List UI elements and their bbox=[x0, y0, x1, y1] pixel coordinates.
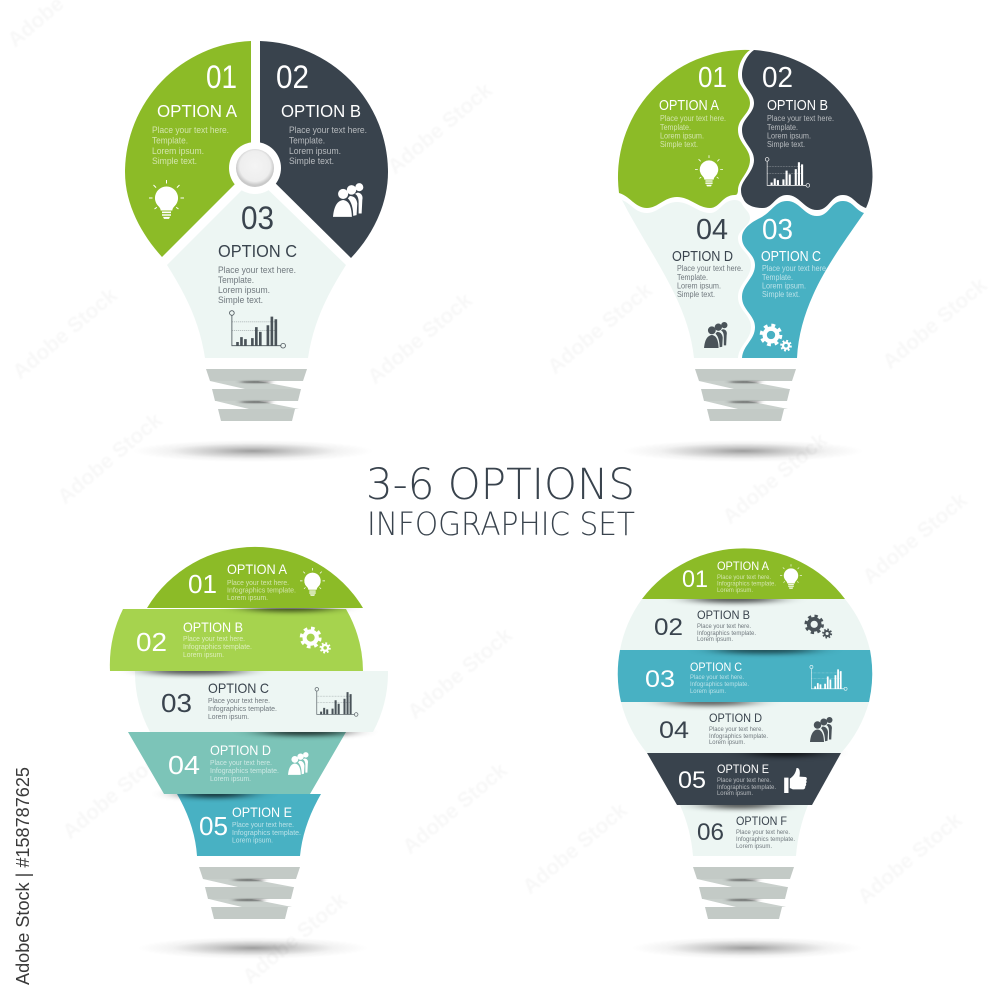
segment 06 option F bbox=[680, 805, 808, 856]
segment 03 option C: Simple text. bbox=[762, 290, 800, 299]
segment 05 option E: Lorem ipsum. bbox=[232, 838, 273, 844]
segment 03 option C: 03 bbox=[762, 214, 793, 246]
segment 02 option B bbox=[741, 50, 873, 210]
segment 05 option E: OPTION E bbox=[717, 762, 769, 776]
panel: bulb with 5 options bbox=[110, 547, 388, 959]
segment 03 option C: Lorem ipsum. bbox=[762, 282, 806, 290]
watermark: Adobe Stock pattern: Adobe Stock bbox=[58, 744, 172, 844]
segment 03 option C: Simple text. bbox=[218, 295, 263, 305]
segment 04 option D: Infographics template. bbox=[709, 733, 768, 740]
side credit: Adobe Stock id: Adobe Stock | #158787625 bbox=[13, 767, 33, 985]
segment 03 option C: 03 bbox=[241, 200, 274, 236]
watermark: Adobe Stock pattern: Adobe Stock bbox=[853, 809, 967, 909]
segment 05 option E bbox=[647, 753, 841, 809]
segment 03 option C: Lorem ipsum. bbox=[218, 285, 270, 295]
segment 01 option A: Place your text here. bbox=[227, 580, 289, 587]
segment 04 option D: 04 bbox=[659, 717, 689, 744]
panel: bulb with 3 options bbox=[125, 41, 388, 462]
lamp base bbox=[695, 369, 796, 421]
segment 05 option E: Infographics template. bbox=[232, 830, 301, 837]
segment 02 option B: 02 bbox=[136, 627, 167, 657]
segment 01 option A bbox=[618, 50, 750, 208]
segment 03 option C: OPTION C bbox=[690, 660, 742, 674]
watermark: Adobe Stock pattern: Adobe Stock bbox=[403, 624, 517, 724]
segment 01 option A: Lorem ipsum. bbox=[227, 595, 268, 602]
segment 06 option F: Place your text here. bbox=[736, 829, 790, 836]
segment 01 option A: Place your text here. bbox=[660, 114, 726, 123]
watermark: Adobe Stock pattern: Adobe Stock bbox=[858, 489, 972, 589]
segment 02 option B: Lorem ipsum. bbox=[183, 652, 224, 659]
segment 02 option B: Infographics template. bbox=[183, 644, 252, 651]
segment 01 option A: Template. bbox=[660, 123, 691, 132]
segment 03 option C: Lorem ipsum. bbox=[208, 714, 249, 721]
segment 04 option D: Lorem ipsum. bbox=[210, 776, 251, 783]
segment 04 option D: Place your text here. bbox=[210, 760, 272, 767]
segment 05 option E: Place your text here. bbox=[232, 822, 294, 829]
segment 03 option C: Place your text here. bbox=[690, 674, 744, 681]
watermark: Adobe Stock pattern: Adobe Stock bbox=[878, 274, 992, 374]
segment 04 option D bbox=[622, 200, 751, 358]
segment 04 option D: Infographics template. bbox=[210, 768, 279, 775]
segment 01 option A bbox=[642, 548, 845, 603]
title: 3-6 OPTIONS bbox=[366, 460, 635, 510]
segment 03 option C: OPTION C bbox=[218, 241, 297, 261]
bulb shadow bbox=[623, 440, 863, 462]
segment 01 option A: OPTION A bbox=[227, 561, 288, 577]
segment 01 option A: OPTION A bbox=[659, 98, 719, 114]
segment 02 option B: Place your text here. bbox=[697, 623, 751, 630]
segment 02 option B: OPTION B bbox=[697, 608, 750, 622]
segment 05 option E: Place your text here. bbox=[717, 777, 771, 784]
segment 04 option D: Simple text. bbox=[677, 290, 715, 299]
segment 01 option A: Infographics template. bbox=[227, 588, 296, 594]
segment 04 option D: OPTION D bbox=[709, 711, 762, 725]
segment 03 option C: Infographics template. bbox=[690, 681, 749, 688]
segment 02 option B: Lorem ipsum. bbox=[697, 636, 733, 643]
segment 02 option B: OPTION B bbox=[281, 101, 361, 121]
segment 01 option A: 01 bbox=[206, 59, 237, 95]
segment 06 option F: Infographics template. bbox=[736, 836, 795, 843]
segment 03 option C bbox=[135, 671, 388, 736]
segment 03 option C bbox=[167, 177, 346, 358]
segment 01 option A: 01 bbox=[698, 62, 727, 94]
watermark: Adobe Stock pattern: Adobe Stock bbox=[363, 289, 477, 389]
segment 04 option D: Lorem ipsum. bbox=[709, 739, 745, 746]
segment 03 option C: OPTION C bbox=[208, 680, 269, 696]
segment 04 option D: OPTION D bbox=[672, 249, 733, 265]
segment 01 option A: 01 bbox=[188, 569, 217, 599]
segment 04 option D: Place your text here. bbox=[709, 726, 763, 733]
watermark: Adobe Stock pattern: Adobe Stock bbox=[8, 284, 122, 384]
segment 02 option B: Infographics template. bbox=[697, 630, 756, 637]
watermark: Adobe Stock pattern: Adobe Stock bbox=[383, 79, 497, 179]
segment 03 option C: Infographics template. bbox=[208, 706, 277, 713]
panel: bulb with 6 options bbox=[618, 548, 872, 959]
segment 02 option B: 02 bbox=[276, 59, 309, 95]
segment 03 option C bbox=[618, 650, 872, 706]
segment 01 option A: OPTION A bbox=[157, 101, 237, 121]
segment 02 option B: Place your text here. bbox=[767, 114, 834, 123]
bulb shadow bbox=[133, 440, 373, 462]
segment 05 option E: 05 bbox=[678, 767, 706, 794]
segment 05 option E: 05 bbox=[199, 811, 228, 841]
segment 05 option E: Infographics template. bbox=[717, 784, 776, 791]
segment 03 option C: Place your text here. bbox=[208, 698, 270, 705]
title bbox=[366, 460, 635, 543]
bulb shadow bbox=[632, 937, 862, 959]
segment 01 option A: Lorem ipsum. bbox=[660, 132, 704, 140]
segment 02 option B: Template. bbox=[767, 123, 798, 132]
watermark: Adobe Stock pattern: Adobe Stock bbox=[543, 279, 657, 379]
segment 03 option C bbox=[742, 201, 864, 358]
segment 02 option B: Lorem ipsum. bbox=[767, 132, 811, 140]
segment 03 option C: Lorem ipsum. bbox=[690, 688, 726, 695]
segment 01 option A bbox=[125, 41, 251, 257]
segment 04 option D: Lorem ipsum. bbox=[677, 282, 721, 290]
segment 05 option E: OPTION E bbox=[232, 804, 292, 820]
segment 05 option E: Lorem ipsum. bbox=[717, 790, 753, 797]
segment 01 option A: OPTION A bbox=[717, 559, 769, 573]
segment 01 option A: Lorem ipsum. bbox=[717, 587, 753, 594]
segment 01 option A: Template. bbox=[152, 136, 188, 146]
segment 02 option B: Lorem ipsum. bbox=[289, 146, 341, 156]
watermark: Adobe Stock pattern: Adobe Stock bbox=[238, 889, 352, 989]
segment 03 option C: 03 bbox=[645, 666, 675, 693]
segment 01 option A: Simple text. bbox=[152, 156, 197, 166]
segment 01 option A: Place your text here. bbox=[152, 125, 229, 135]
segment 02 option B: Simple text. bbox=[289, 156, 334, 166]
segment 02 option B: Place your text here. bbox=[183, 636, 245, 643]
segment 01 option A: Infographics template. bbox=[717, 580, 776, 588]
segment 03 option C: Place your text here. bbox=[218, 265, 296, 275]
watermark: Adobe Stock pattern: Adobe Stock bbox=[718, 429, 832, 529]
segment 02 option B: 02 bbox=[762, 62, 793, 94]
segment 03 option C: 03 bbox=[161, 688, 192, 718]
segment 06 option F: 06 bbox=[697, 819, 724, 846]
segment 02 option B: 02 bbox=[654, 614, 683, 641]
segment 03 option C: Place your text here. bbox=[762, 264, 828, 273]
segment 02 option B: Simple text. bbox=[767, 140, 805, 149]
watermark: Adobe Stock pattern: Adobe Stock bbox=[398, 759, 512, 859]
segment 02 option B: Place your text here. bbox=[289, 125, 367, 135]
segment 04 option D: Template. bbox=[677, 273, 708, 282]
segment 04 option D: OPTION D bbox=[210, 742, 271, 758]
segment 04 option D: 04 bbox=[168, 750, 200, 780]
segment 06 option F: OPTION F bbox=[736, 814, 787, 828]
segment 01 option A bbox=[147, 547, 363, 612]
segment 03 option C: Template. bbox=[762, 273, 793, 282]
lamp base bbox=[199, 867, 300, 919]
segment 02 option B bbox=[260, 41, 388, 258]
segment 04 option D: Place your text here. bbox=[677, 264, 743, 273]
segment 02 option B: OPTION B bbox=[767, 98, 828, 114]
title: INFOGRAPHIC SET bbox=[367, 505, 635, 543]
watermark: Adobe Stock pattern: Adobe Stock bbox=[518, 799, 632, 899]
segment 06 option F: Lorem ipsum. bbox=[736, 843, 772, 850]
lamp base bbox=[693, 867, 794, 919]
segment 04 option D bbox=[621, 702, 869, 757]
segment 01 option A: Place your text here. bbox=[717, 574, 771, 581]
panel: bulb with 4 options bbox=[618, 50, 873, 462]
bulb shadow bbox=[138, 937, 368, 959]
segment 04 option D: 04 bbox=[696, 214, 728, 246]
segment 02 option B: OPTION B bbox=[183, 619, 243, 635]
watermark: Adobe Stock pattern: Adobe Stock bbox=[53, 409, 167, 509]
segment 03 option C: Template. bbox=[218, 275, 254, 285]
center disc bbox=[229, 142, 281, 194]
segment 05 option E bbox=[177, 794, 321, 856]
segment 03 option C: OPTION C bbox=[761, 249, 821, 265]
lamp base bbox=[206, 369, 307, 421]
segment 04 option D bbox=[128, 732, 346, 798]
segment 01 option A: Simple text. bbox=[660, 140, 698, 149]
segment 01 option A: Lorem ipsum. bbox=[152, 146, 204, 156]
segment 02 option B: Template. bbox=[289, 136, 325, 146]
segment 01 option A: 01 bbox=[682, 566, 708, 593]
segment 02 option B bbox=[110, 609, 363, 675]
segment 02 option B bbox=[620, 599, 870, 654]
